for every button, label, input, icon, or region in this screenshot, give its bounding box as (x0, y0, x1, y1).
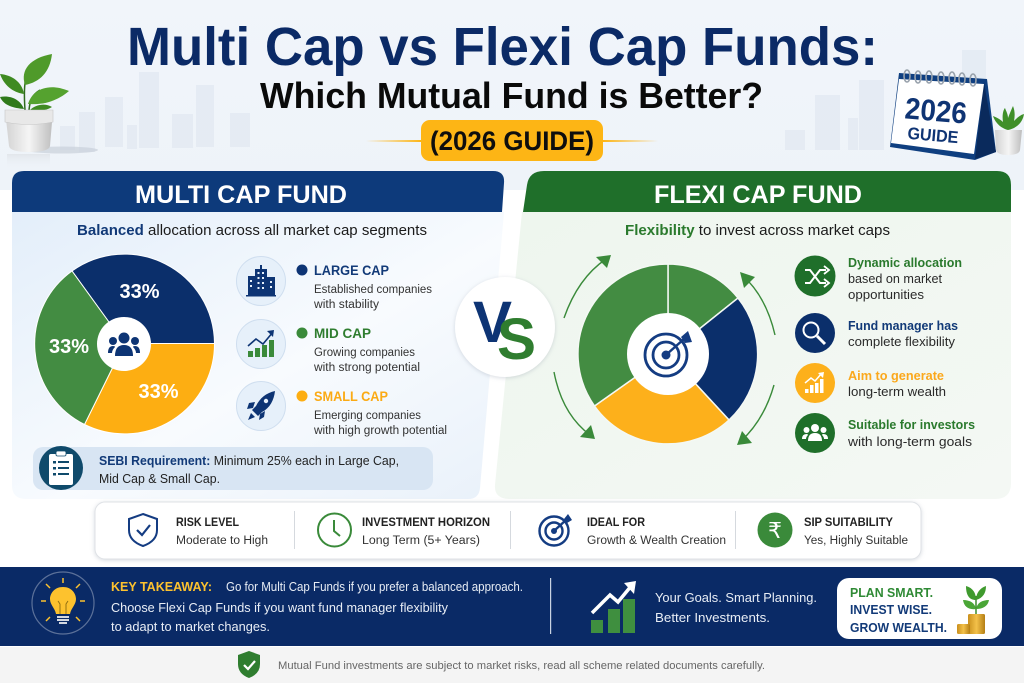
vs badge: V (473, 290, 512, 355)
plan smart card: INVEST WISE. (850, 602, 932, 617)
goals text (655, 591, 817, 625)
icon: growth chart arrow (591, 581, 636, 633)
takeaway text: Choose Flexi Cap Funds if you want fund manager flexibility (111, 601, 449, 615)
takeaway text: to adapt to market changes. (111, 620, 270, 634)
fund manager item: Fund manager has (848, 319, 958, 333)
icon: buildings (246, 265, 276, 296)
icon: green shield check (238, 651, 260, 678)
ideal for: Growth & Wealth Creation (587, 535, 726, 547)
icon: people (108, 332, 140, 356)
icon: target (540, 514, 572, 546)
flexi cap header: FLEXI CAP FUND (654, 181, 862, 209)
vs badge (455, 277, 555, 377)
large cap item: with stability (313, 299, 379, 311)
icon: clipboard (49, 451, 73, 485)
suitable investors item: with long-term goals (847, 435, 972, 449)
icon: 2026 guide calendar: GUIDE (907, 124, 959, 147)
pie chart: equal allocation: 33% (49, 336, 89, 358)
suitable investors item (795, 413, 975, 453)
guide pill (366, 120, 658, 161)
icon: shield with check (129, 514, 157, 546)
cycle arrows (554, 255, 775, 445)
long-term wealth item (795, 363, 946, 403)
risk level: RISK LEVEL (176, 517, 239, 529)
icon: growth bars (805, 372, 824, 393)
multi cap header (12, 171, 504, 212)
footer disclaimer (0, 647, 1024, 683)
sebi requirement callout: Mid Cap & Small Cap. (99, 472, 220, 486)
goals text: Better Investments. (655, 611, 770, 625)
dynamic allocation item: based on market (848, 272, 943, 286)
ideal for (540, 514, 726, 547)
investment horizon (318, 514, 490, 547)
icon: magnifier (804, 322, 825, 344)
info bar (95, 502, 921, 559)
icon: rocket (247, 391, 275, 420)
plan smart card: PLAN SMART. (850, 585, 933, 600)
dynamic allocation item: opportunities (848, 288, 924, 302)
takeaway text: KEY TAKEAWAY: (111, 579, 212, 594)
fund manager item: complete flexibility (848, 335, 956, 349)
goals text: Your Goals. Smart Planning. (655, 591, 817, 605)
dynamic allocation item (794, 256, 962, 302)
small cap item: Emerging companies (314, 410, 421, 422)
header background (0, 0, 1024, 190)
icon: target with arrow (645, 331, 692, 376)
long-term wealth item: long-term wealth (848, 385, 946, 399)
mid cap item (236, 320, 420, 374)
mid cap item: MID CAP (314, 326, 371, 341)
small cap item: with high growth potential (313, 425, 447, 437)
donut chart: flexible allocation (578, 264, 758, 444)
sip suitability (758, 512, 908, 548)
risk level: Moderate to High (176, 535, 268, 547)
icon: rupee (758, 512, 792, 548)
key takeaway banner (0, 567, 1024, 646)
icon: rupee: ₹ (768, 519, 782, 544)
multi cap subtitle: Balanced allocation across all market cap segments (77, 223, 427, 239)
ideal for: IDEAL FOR (587, 517, 646, 529)
panel: multi cap fund (12, 171, 504, 499)
pie chart: equal allocation: 33% (119, 281, 160, 303)
icon: light bulb (32, 572, 94, 634)
investment horizon: Long Term (5+ Years) (362, 535, 480, 547)
icon: clock (318, 514, 351, 546)
dynamic allocation item: Dynamic allocation (848, 256, 962, 270)
risk level (129, 514, 268, 547)
takeaway text (111, 579, 523, 634)
sebi requirement callout: SEBI Requirement: Minimum 25% each in Large Cap, (99, 454, 399, 468)
icon: shuffle (805, 266, 829, 287)
guide pill: (2026 GUIDE) (430, 126, 594, 156)
panel: flexi cap fund (495, 171, 1011, 499)
footer disclaimer: Mutual Fund investments are subject to market risks, read all scheme related documents carefully. (278, 660, 765, 672)
sebi requirement callout (33, 446, 433, 490)
investment horizon: INVESTMENT HORIZON (362, 517, 490, 529)
suitable investors item: Suitable for investors (848, 418, 975, 432)
large cap item (236, 256, 432, 311)
mid cap item: Growing companies (314, 347, 415, 359)
title: Multi Cap vs Flexi Cap Funds: (127, 17, 878, 77)
multi cap header: MULTI CAP FUND (135, 181, 347, 209)
small cap item (236, 382, 447, 437)
icon: potted plant (0, 54, 98, 154)
long-term wealth item: Aim to generate (848, 369, 944, 383)
title: Which Mutual Fund is Better? (260, 75, 763, 116)
icon: growth chart (248, 330, 274, 357)
large cap item: Established companies (314, 284, 432, 296)
icon: people (802, 424, 828, 441)
large cap item: LARGE CAP (314, 263, 389, 278)
vs badge: S (497, 307, 536, 372)
mid cap item: with strong potential (313, 362, 420, 374)
sip suitability: SIP SUITABILITY (804, 517, 893, 529)
icon: 2026 guide calendar: 2026 (904, 92, 968, 131)
icon: coins and sprout (957, 586, 989, 634)
pie chart: equal allocation: 33% (138, 381, 179, 403)
flexi cap subtitle: Flexibility to invest across market caps (625, 223, 890, 239)
takeaway text: Go for Multi Cap Funds if you prefer a balanced approach. (226, 580, 523, 594)
title (127, 17, 878, 116)
fund manager item (795, 313, 958, 353)
icon: small plant (993, 106, 1024, 155)
pie chart: equal allocation (35, 254, 215, 434)
plan smart card (837, 578, 1002, 639)
flexi cap header (523, 171, 1011, 212)
small cap item: SMALL CAP (314, 389, 388, 404)
sip suitability: Yes, Highly Suitable (804, 535, 908, 547)
icon: 2026 guide calendar (890, 70, 996, 160)
plan smart card: GROW WEALTH. (850, 620, 947, 635)
